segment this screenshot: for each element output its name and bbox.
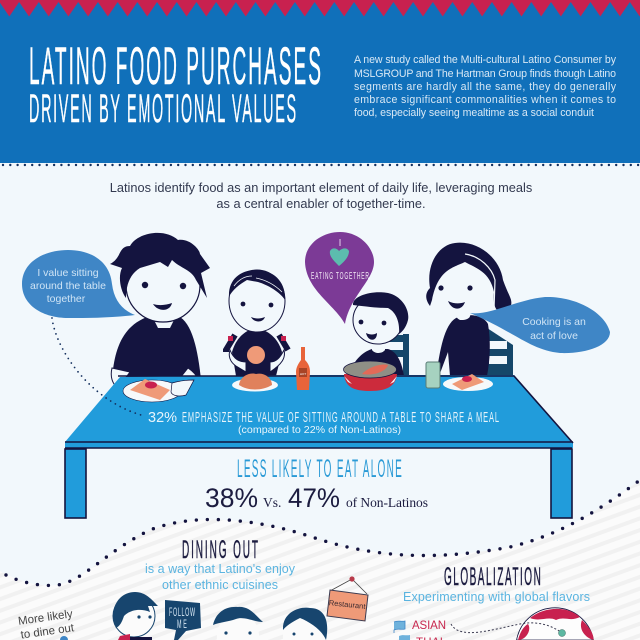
- icon: cup: [426, 362, 440, 388]
- icon: restaurant sign: Restaurant: [328, 598, 367, 611]
- title: [29, 37, 321, 131]
- figure: woman: [426, 243, 511, 376]
- figure: boy: [349, 292, 408, 376]
- icon: bowl: [344, 361, 397, 391]
- statistic: 38 vs 47 percent: Vs.: [263, 495, 281, 510]
- statistic: 32 percent around a table: (compared to 22% of Non-Latinos): [238, 425, 401, 436]
- text block: lead statement: [110, 180, 532, 211]
- text block: study introduction: food, especially seeing mealtime as a social conduit: [354, 107, 594, 119]
- speech bubble: sitting around the table: I value sitting: [37, 267, 99, 279]
- list: cuisines: [394, 620, 446, 640]
- text block: globalization subtitle: Experimenting with global flavors: [403, 590, 590, 604]
- table: [65, 375, 573, 518]
- speech bubble: follow me: ME: [177, 618, 187, 631]
- speech bubble: eating together: EATING TOGETHER: [311, 270, 369, 282]
- text block: lead statement: Latinos identify food as an important element of daily life, leveraging meals: [110, 180, 532, 195]
- figure: girl: [226, 270, 288, 376]
- title: DRIVEN BY EMOTIONAL VALUES: [29, 87, 296, 131]
- text block: study introduction: embrace significant commonalities when it comes to: [354, 94, 616, 106]
- statistic: 38 vs 47 percent: 38%: [205, 483, 258, 513]
- figure: dining man: [113, 592, 158, 640]
- speech bubble: eating together: [305, 232, 374, 324]
- speech bubble: cooking is an act of love: [470, 297, 610, 353]
- icon: restaurant sign: [327, 576, 368, 621]
- speech bubble: cooking is an act of love: Cooking is an: [522, 316, 586, 328]
- speech bubble: sitting around the table: together: [47, 293, 86, 305]
- statistic: 38 vs 47 percent: [205, 483, 428, 513]
- plate: man's meal: [123, 379, 194, 402]
- statistic: 38 vs 47 percent: of Non-Latinos: [346, 495, 428, 510]
- heading: dining out: DINING OUT: [182, 537, 258, 565]
- icon: globe: [517, 608, 593, 640]
- speech bubble: sitting around the table: [22, 250, 135, 318]
- chair: behind boy: [385, 334, 409, 376]
- text block: more likely to dine out: [17, 608, 76, 640]
- speech bubble: cooking is an act of love: act of love: [530, 330, 578, 342]
- icon: dine out marker: [60, 636, 68, 640]
- figure: man: [110, 233, 210, 396]
- figure: dining boy: [213, 607, 263, 640]
- statistic: 38 vs 47 percent: 47%: [288, 483, 340, 513]
- panel: header banner: [0, 0, 640, 165]
- text block: dining out subtitle: other ethnic cuisines: [162, 578, 278, 592]
- speech bubble: eating together: I: [339, 238, 341, 249]
- connector: globe route: [451, 623, 566, 636]
- text block: more likely to dine out: More likely: [17, 608, 74, 628]
- panel: bottom striped wave background: [0, 480, 640, 640]
- title: LATINO FOOD PURCHASES: [29, 37, 321, 96]
- speech bubble: follow me: FOLLOW: [169, 606, 195, 619]
- text block: dining out subtitle: [145, 562, 296, 592]
- text block: study introduction: MSLGROUP and The Hartman Group finds though Latino: [354, 68, 616, 80]
- text block: lead statement: as a central enabler of together-time.: [216, 196, 426, 211]
- dotted connector: [52, 318, 141, 415]
- text block: study introduction: segments are hardly all the same, they do generally: [354, 81, 617, 93]
- chair: behind woman: [484, 326, 513, 376]
- plate: girl's meal: [232, 373, 278, 392]
- heading: globalization: GLOBALIZATION: [444, 564, 541, 592]
- speech bubble: follow me: [165, 600, 201, 640]
- statistic: 32 percent around a table: EMPHASIZE THE VALUE OF SITTING AROUND A TABLE TO SHARE A MEAL: [182, 408, 499, 426]
- statistic: 32 percent around a table: 32%: [148, 410, 177, 426]
- icon: heart: [330, 248, 349, 266]
- icon: hot sauce bottle: HOT: [300, 372, 306, 376]
- icon: hot sauce bottle: [296, 347, 310, 390]
- text block: study introduction: [354, 54, 617, 119]
- speech bubble: sitting around the table: around the table: [30, 280, 106, 292]
- text block: study introduction: A new study called the Multi-cultural Latino Consumer by: [354, 54, 617, 66]
- figure: dining woman: [283, 608, 327, 640]
- list: cuisines: ASIAN: [412, 620, 446, 632]
- text block: dining out subtitle: is a way that Latino's enjoy: [145, 562, 296, 576]
- heading: less likely to eat alone: LESS LIKELY TO EAT ALONE: [237, 456, 402, 484]
- plate: woman's meal: [443, 374, 493, 391]
- statistic: 32 percent around a table: [148, 408, 499, 436]
